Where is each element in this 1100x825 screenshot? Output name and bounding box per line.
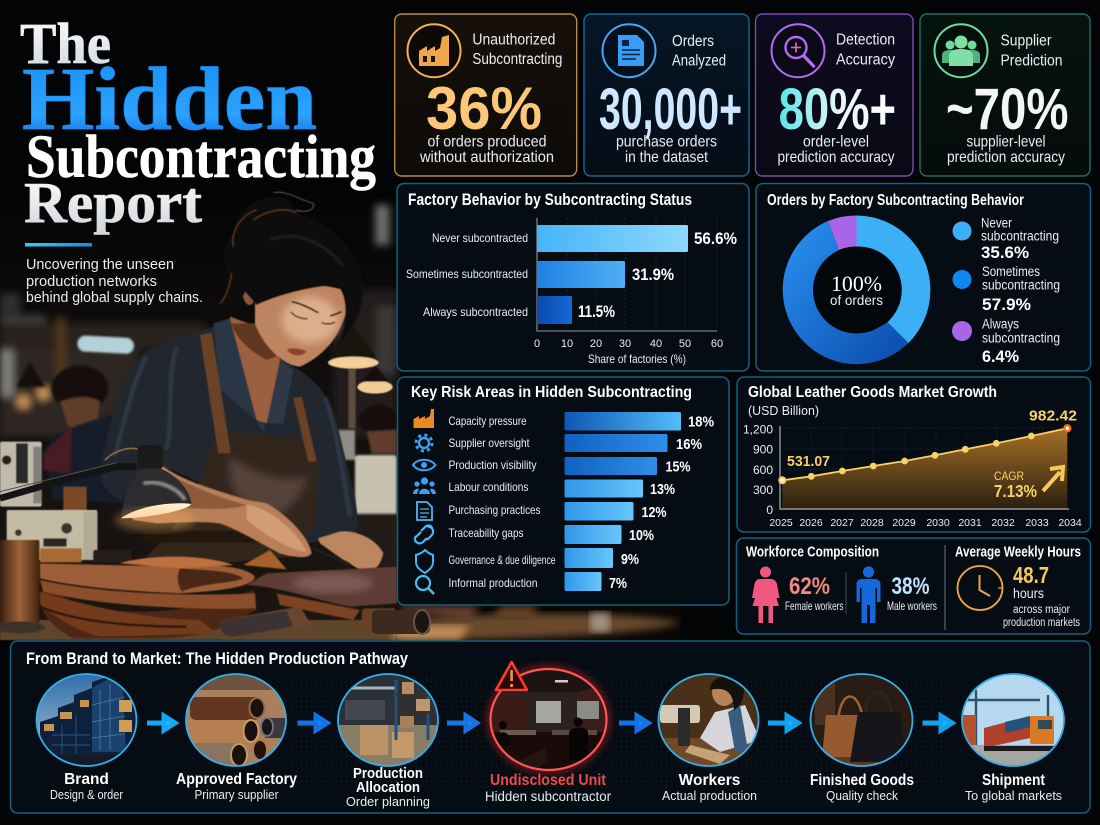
line chart: 900 bbox=[753, 442, 773, 456]
card: detection accuracy: Detection bbox=[836, 32, 895, 48]
card: unauthorized subcontracting: of orders produced bbox=[428, 134, 546, 150]
card: supplier prediction: Supplier bbox=[1000, 32, 1052, 50]
step: approved factory: Primary supplier bbox=[194, 788, 278, 802]
panel: factory behavior: Factory Behavior by Subcontracting Status bbox=[408, 191, 692, 209]
line chart: 2032 bbox=[991, 517, 1015, 529]
card: orders analyzed: purchase orders bbox=[616, 134, 717, 150]
risk values: 9% bbox=[621, 551, 639, 568]
step: brand bbox=[36, 673, 138, 802]
legend: subcontracting bbox=[981, 228, 1059, 244]
line chart: 2031 bbox=[958, 517, 982, 529]
line chart: 2025 bbox=[769, 517, 793, 529]
panel: factory behavior bbox=[397, 184, 749, 371]
bar chart: factories: 11.5% bbox=[578, 302, 615, 321]
icon: document bbox=[602, 24, 656, 77]
background workers bbox=[43, 366, 400, 567]
card: unauthorized subcontracting bbox=[395, 14, 577, 176]
card: unauthorized subcontracting: without authorization bbox=[419, 149, 554, 166]
line chart: 982.42 bbox=[1029, 408, 1077, 424]
step: brand: Design & order bbox=[50, 788, 123, 802]
step: undisclosed unit bbox=[485, 662, 615, 804]
card: supplier prediction: Prediction bbox=[1000, 52, 1062, 70]
panel: market growth: Global Leather Goods Market Growth bbox=[748, 384, 997, 401]
icon: female worker bbox=[752, 566, 780, 623]
risk labels: Supplier oversight bbox=[448, 436, 530, 450]
subtitle bbox=[26, 256, 203, 306]
bar chart: factories: Sometimes subcontracted bbox=[406, 267, 528, 281]
panel: market growth bbox=[737, 377, 1090, 532]
bar chart: factories: 10 bbox=[561, 338, 573, 350]
risk values: 18% bbox=[688, 414, 714, 430]
step: brand: Brand bbox=[64, 771, 109, 788]
title bbox=[20, 11, 376, 235]
table strip below risk panel bbox=[372, 606, 680, 641]
bar chart: factories: Always subcontracted bbox=[423, 305, 528, 319]
donut chart: 100% bbox=[831, 271, 882, 296]
bar chart: factories bbox=[406, 218, 737, 366]
risk values bbox=[609, 414, 714, 592]
bar chart: factories: 31.9% bbox=[632, 265, 674, 284]
title: The bbox=[20, 11, 111, 76]
line chart: 600 bbox=[753, 463, 773, 477]
risk values: 10% bbox=[629, 527, 654, 544]
risk values: 7% bbox=[609, 575, 627, 592]
icon: clock bbox=[958, 566, 1002, 610]
step: workers bbox=[655, 670, 763, 803]
title: Report bbox=[24, 170, 203, 235]
line chart: 1,200 bbox=[743, 422, 773, 436]
arrow bbox=[147, 716, 175, 730]
card: unauthorized subcontracting: 36% bbox=[426, 75, 542, 142]
line chart: 7.13% bbox=[994, 481, 1037, 501]
subtitle: Uncovering the unseen bbox=[26, 256, 174, 273]
arrow bbox=[768, 716, 798, 730]
woman bbox=[101, 192, 383, 572]
step: approved factory bbox=[176, 670, 297, 802]
line chart: 300 bbox=[753, 483, 773, 497]
arrow: growth bbox=[1043, 467, 1063, 491]
risk values: 12% bbox=[642, 504, 666, 521]
sewing machines bbox=[0, 442, 97, 560]
step: production allocation: Production bbox=[353, 766, 423, 782]
bar chart: factories: 56.6% bbox=[694, 229, 737, 248]
legend: Sometimes bbox=[982, 264, 1040, 279]
panel: workforce and hours: 38% bbox=[892, 573, 930, 600]
arrow bbox=[447, 716, 476, 730]
risk labels: Traceability gaps bbox=[448, 526, 524, 540]
risk labels: Labour conditions bbox=[448, 480, 528, 494]
risk labels: Governance & due diligence bbox=[448, 553, 556, 567]
photo: leather worker at workbench bbox=[0, 190, 400, 640]
card: supplier prediction: prediction accuracy bbox=[947, 149, 1065, 166]
subtitle: production networks bbox=[26, 273, 157, 290]
bar chart: factories: Never subcontracted bbox=[432, 231, 528, 245]
risk labels: Capacity pressure bbox=[448, 414, 527, 428]
legend: 57.9% bbox=[982, 295, 1031, 314]
line chart: 2028 bbox=[860, 517, 884, 529]
panel: workforce and hours: hours bbox=[1013, 586, 1044, 601]
arrow bbox=[298, 716, 327, 730]
card: detection accuracy: order-level bbox=[803, 134, 869, 150]
desk lamp bbox=[0, 445, 195, 532]
bar chart: factories: 30 bbox=[619, 338, 631, 350]
line chart: 2034 bbox=[1058, 517, 1082, 529]
risk labels: Production visibility bbox=[448, 458, 536, 472]
line chart bbox=[743, 408, 1082, 529]
title: Subcontracting bbox=[26, 124, 376, 191]
panel: production pathway bbox=[10, 641, 1090, 813]
card: supplier prediction: supplier-level bbox=[966, 134, 1046, 150]
risk values: 16% bbox=[676, 436, 702, 453]
step: shipment: To global markets bbox=[965, 788, 1062, 803]
step: production allocation bbox=[335, 670, 443, 809]
bar chart: factories: Share of factories (%) bbox=[588, 352, 686, 366]
panel: orders donut: Orders by Factory Subcontracting Behavior bbox=[767, 192, 1024, 209]
leather on table bbox=[0, 540, 400, 640]
step: finished goods: Quality check bbox=[826, 788, 898, 803]
bar chart: factories: 60 bbox=[711, 338, 723, 350]
step: finished goods: Finished Goods bbox=[810, 772, 914, 789]
bar chart: factories: 0 bbox=[534, 338, 540, 350]
panel: orders donut bbox=[756, 184, 1090, 371]
step: finished goods bbox=[810, 673, 914, 802]
icon: factory bbox=[408, 24, 460, 77]
legend: 6.4% bbox=[982, 347, 1019, 366]
risk icons bbox=[413, 409, 436, 594]
panel: workforce and hours bbox=[736, 538, 1090, 634]
icon: people bbox=[934, 24, 988, 77]
subtitle: behind global supply chains. bbox=[26, 289, 203, 306]
legend: Never bbox=[981, 216, 1012, 230]
legend: Always bbox=[982, 316, 1019, 332]
card: supplier prediction: ~70% bbox=[946, 77, 1068, 142]
risk values: 13% bbox=[650, 481, 675, 498]
icon: male worker bbox=[856, 566, 880, 623]
step: shipment bbox=[960, 670, 1068, 803]
card: orders analyzed: Analyzed bbox=[672, 52, 726, 70]
card: supplier prediction bbox=[920, 14, 1090, 176]
bar chart: factories: 50 bbox=[679, 338, 691, 350]
panel: key risk areas: Key Risk Areas in Hidden Subcontracting bbox=[411, 384, 692, 401]
step: production allocation: Allocation bbox=[356, 780, 420, 796]
title: Hidden bbox=[22, 50, 317, 149]
step: approved factory: Approved Factory bbox=[176, 771, 297, 788]
legend bbox=[952, 216, 1060, 366]
legend: 35.6% bbox=[981, 243, 1029, 262]
line chart: CAGR bbox=[994, 469, 1024, 483]
donut chart bbox=[783, 215, 930, 364]
panel: key risk areas bbox=[398, 377, 729, 605]
arrow bbox=[922, 716, 952, 730]
panel: production pathway: From Brand to Market: The Hidden Production Pathway bbox=[26, 650, 409, 668]
line chart: 2030 bbox=[926, 517, 950, 529]
card: unauthorized subcontracting: Subcontracting bbox=[472, 51, 562, 68]
step: shipment: Shipment bbox=[982, 772, 1045, 789]
risk values: 15% bbox=[666, 458, 690, 476]
card: orders analyzed: in the dataset bbox=[625, 149, 708, 166]
card: unauthorized subcontracting: Unauthorized bbox=[472, 32, 555, 48]
card: orders analyzed: 30,000+ bbox=[599, 77, 742, 142]
line chart: 2026 bbox=[799, 517, 823, 529]
icon: warning triangle bbox=[496, 662, 527, 690]
line chart: 0 bbox=[766, 503, 773, 517]
icon: magnifier bbox=[772, 24, 824, 77]
step: workers: Actual production bbox=[662, 788, 757, 803]
donut chart: of orders bbox=[830, 292, 883, 308]
risk labels bbox=[448, 414, 556, 590]
legend: subcontracting bbox=[982, 330, 1060, 346]
panel: workforce and hours: Workforce Composition bbox=[746, 544, 879, 560]
card: detection accuracy: 80%+ bbox=[779, 77, 896, 142]
panel: workforce and hours: 48.7 bbox=[1013, 562, 1049, 588]
bar chart: factories: 20 bbox=[590, 338, 602, 350]
panel: workforce and hours: 62% bbox=[789, 573, 830, 600]
risk labels: Purchasing practices bbox=[448, 503, 540, 517]
panel: market growth: (USD Billion) bbox=[748, 404, 819, 418]
legend: subcontracting bbox=[982, 278, 1060, 292]
panel: workforce and hours: production markets bbox=[1003, 617, 1080, 629]
line chart: 2033 bbox=[1025, 517, 1049, 529]
line chart: 2027 bbox=[830, 517, 854, 529]
line chart: 2029 bbox=[892, 517, 916, 529]
line chart: 531.07 bbox=[787, 453, 830, 470]
card: detection accuracy: Accuracy bbox=[836, 52, 895, 68]
card: detection accuracy: prediction accuracy bbox=[778, 149, 894, 166]
risk bars bbox=[564, 412, 681, 591]
risk labels: Informal production bbox=[448, 576, 538, 590]
arrow bbox=[619, 716, 648, 730]
step: workers: Workers bbox=[679, 772, 740, 789]
card: orders analyzed bbox=[584, 14, 749, 176]
panel: workforce and hours: across major bbox=[1013, 604, 1070, 616]
panel: workforce and hours: Female workers bbox=[785, 599, 844, 613]
title accent line bbox=[25, 243, 92, 246]
step: undisclosed unit: Undisclosed Unit bbox=[490, 772, 606, 789]
card: detection accuracy bbox=[756, 14, 913, 176]
step: undisclosed unit: Hidden subcontractor bbox=[485, 789, 611, 804]
bar chart: factories: 40 bbox=[650, 338, 662, 350]
step: production allocation: Order planning bbox=[346, 794, 430, 809]
panel: workforce and hours: Male workers bbox=[887, 599, 937, 613]
card: orders analyzed: Orders bbox=[672, 33, 714, 50]
